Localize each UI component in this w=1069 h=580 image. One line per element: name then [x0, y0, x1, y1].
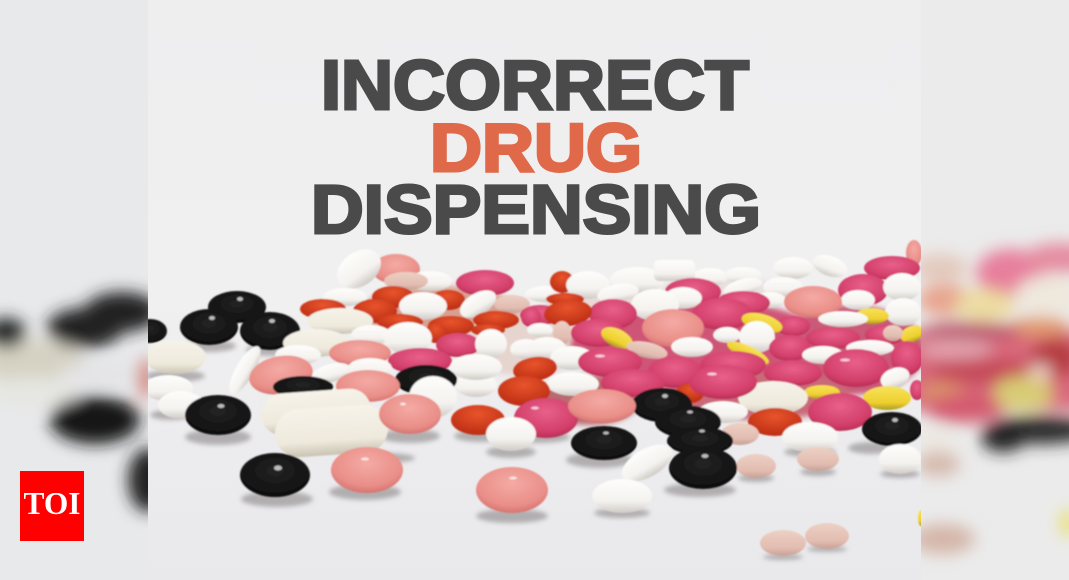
pills: back row [208, 240, 922, 324]
panel: blurred left background [0, 279, 148, 524]
logo: TOI badge: TOI [24, 485, 80, 521]
pill cluster underlayer [360, 276, 925, 425]
pill cluster photo layers [133, 240, 926, 556]
pill shadows [145, 340, 920, 560]
pills photo [133, 240, 926, 560]
title line: DISPENSING: DISPENSING [311, 171, 761, 248]
capsules [260, 387, 390, 459]
panel: blurred right background [921, 234, 1069, 562]
title [311, 46, 761, 248]
title line: DRUG: DRUG [430, 110, 642, 186]
logo: TOI badge [20, 471, 84, 541]
title line: INCORRECT: INCORRECT [321, 46, 749, 124]
pills: middle row [133, 298, 926, 399]
pills: front row [143, 363, 924, 556]
panel: central photo background [148, 0, 921, 580]
